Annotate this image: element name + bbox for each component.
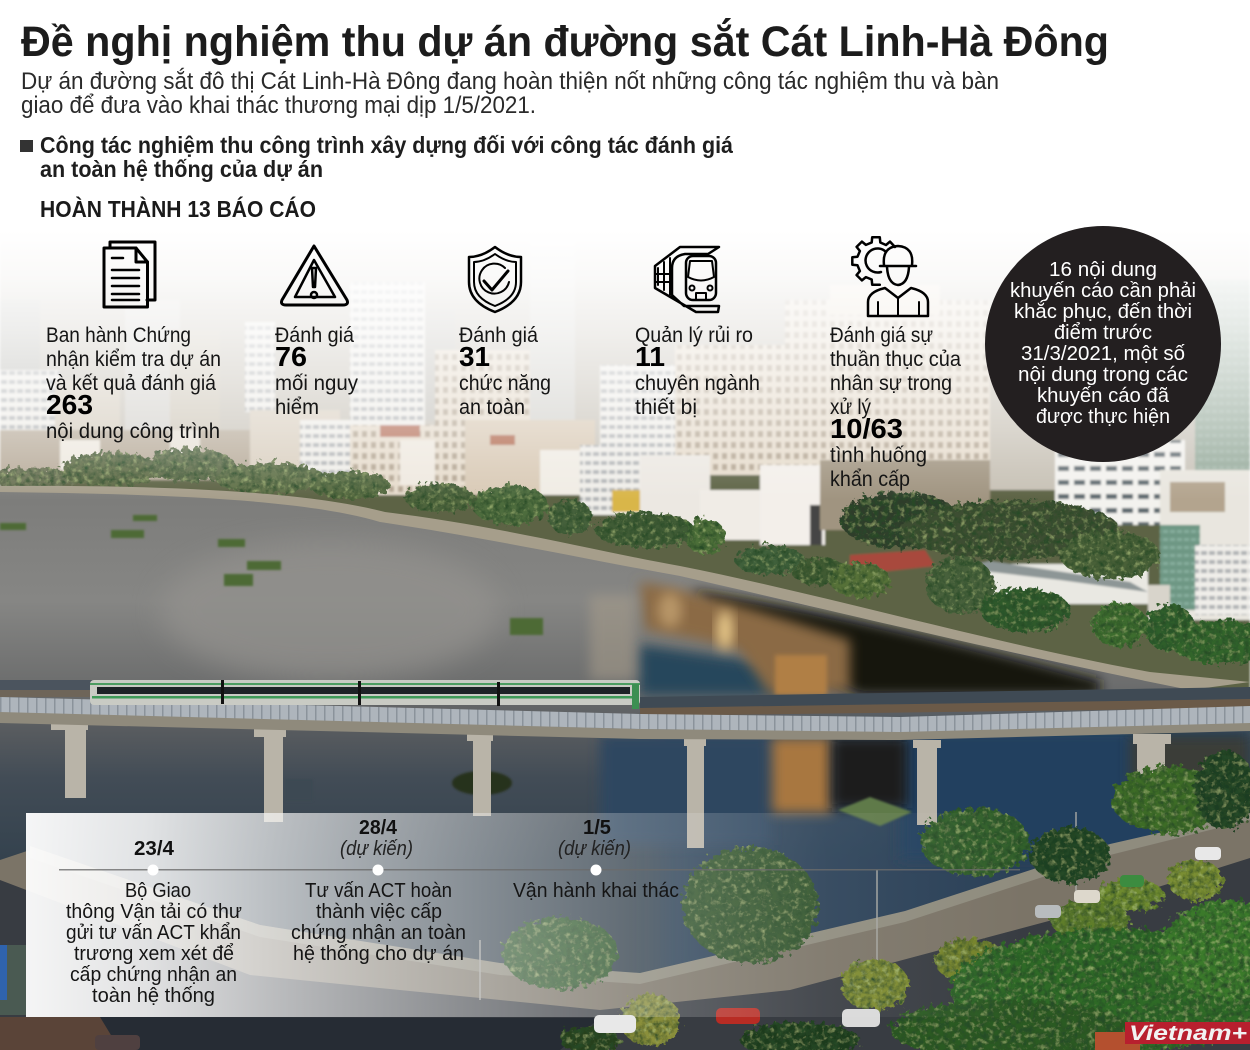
text: certificate: nhận kiểm tra dự án	[46, 348, 221, 371]
logo: Vietnam+: Vietnam+	[1129, 1022, 1247, 1045]
tree line along shore	[0, 448, 1250, 664]
far bottom road and park	[0, 766, 1250, 1050]
milestone 28/4: thành việc cấp	[316, 901, 442, 923]
sub heading: HOÀN THÀNH 13 BÁO CÁO	[40, 195, 316, 222]
item: risk management	[635, 247, 760, 419]
milestone 23/4	[66, 838, 242, 1007]
text: staff proficiency: tình huống	[830, 444, 927, 467]
callout: recommendations circle: điểm trước	[1054, 322, 1152, 344]
text: hazards: Đánh giá	[275, 324, 354, 347]
text: certificate	[46, 324, 221, 443]
pillars	[51, 722, 1171, 848]
milestone 23/4: gửi tư vấn ACT khẩn	[66, 922, 241, 944]
text: risk management	[635, 324, 760, 419]
milestone 1/5: 1/5	[583, 817, 611, 839]
text: staff proficiency: nhân sự trong	[830, 372, 952, 395]
elevated railway	[0, 680, 1250, 848]
icon: metro train	[655, 247, 719, 312]
milestone 1/5	[513, 817, 679, 902]
text: hazards	[275, 324, 358, 419]
text: safety functions: an toàn	[459, 396, 525, 419]
text: staff proficiency	[830, 324, 961, 491]
section heading: an toàn hệ thống của dự án	[40, 156, 323, 182]
text: risk management: Quản lý rủi ro	[635, 324, 753, 347]
milestone 28/4: 28/4	[359, 817, 398, 839]
milestone 28/4: chứng nhận an toàn	[291, 922, 466, 944]
callout: recommendations circle: 31/3/2021, một số	[1021, 343, 1185, 365]
item: hazards	[275, 246, 358, 419]
cars	[95, 847, 1221, 1050]
text: risk management: chuyên ngành	[635, 372, 760, 395]
icon: documents	[104, 242, 155, 307]
text: hazards: mối nguy	[275, 372, 358, 395]
intro text	[21, 68, 999, 119]
text: hazards: hiểm	[275, 396, 319, 419]
item: certificate report	[46, 242, 221, 443]
milestone 23/4: cấp chứng nhận an	[70, 964, 237, 986]
text: certificate: Ban hành Chứng	[46, 324, 191, 347]
milestone 28/4	[291, 817, 466, 965]
callout: recommendations circle: khuyến cáo cần phải	[1010, 280, 1196, 302]
foreground trees	[502, 750, 1250, 1050]
text: staff proficiency: khẩn cấp	[830, 468, 910, 491]
milestone 23/4: thông Vận tải có thư	[66, 901, 242, 923]
item: staff proficiency	[830, 237, 961, 491]
text: risk management: thiết bị	[635, 396, 697, 419]
title: Đề nghị nghiệm thu dự án đường sắt Cát Linh-Hà Đông	[21, 17, 1109, 66]
embankment	[0, 486, 1250, 690]
callout: recommendations circle: nội dung trong các	[1018, 364, 1188, 386]
text: safety functions: Đánh giá	[459, 324, 538, 347]
milestone 1/5: Vận hành khai thác	[513, 880, 679, 902]
milestone 23/4: 23/4	[134, 838, 175, 860]
text: staff proficiency: Đánh giá sự	[830, 324, 933, 347]
item: safety functions	[459, 247, 551, 419]
lake reflections	[590, 582, 1250, 860]
milestone 23/4: toàn hệ thống	[92, 985, 215, 1007]
floating green islands	[0, 515, 912, 826]
text: safety functions: chức năng	[459, 372, 551, 395]
section heading	[40, 132, 733, 182]
callout: recommendations circle: 16 nội dung	[1049, 259, 1157, 281]
section bullet	[20, 140, 33, 152]
milestone 23/4: trương xem xét để	[74, 943, 234, 965]
text: safety functions	[459, 324, 551, 419]
icon: shield with check	[469, 247, 521, 312]
milestone 28/4: hệ thống cho dự án	[293, 943, 464, 965]
text: hazards: 76	[275, 341, 307, 372]
intro text: giao để đưa vào khai thác thương mại dịp 1/5/2021.	[21, 92, 536, 119]
text: risk management: 11	[635, 341, 665, 372]
text: safety functions: 31	[459, 341, 490, 372]
icon: engineer with gear	[852, 237, 928, 316]
text: staff proficiency: 10/63	[830, 413, 903, 444]
text: staff proficiency: xử lý	[830, 396, 871, 419]
text: certificate: nội dung công trình	[46, 420, 220, 443]
milestone 23/4: Bộ Giao	[125, 880, 191, 902]
text: certificate: 263	[46, 389, 93, 420]
callout: recommendations circle	[985, 226, 1221, 462]
train	[90, 680, 640, 709]
milestone 28/4: (dự kiến)	[340, 838, 413, 860]
text: staff proficiency: thuần thục của	[830, 348, 961, 371]
milestone 1/5: (dự kiến)	[558, 838, 631, 860]
city skyline	[0, 225, 1250, 710]
milestone 28/4: Tư vấn ACT hoàn	[305, 880, 452, 902]
timeline axis	[59, 864, 1020, 876]
water	[0, 490, 1250, 1010]
panel: timeline	[26, 813, 1026, 1017]
callout: recommendations circle: được thực hiện	[1036, 406, 1170, 428]
text: certificate: và kết quả đánh giá	[46, 372, 216, 395]
icon: warning triangle	[282, 246, 348, 305]
section heading: Công tác nghiệm thu công trình xây dựng đối với công tác đánh giá	[40, 132, 733, 158]
callout: recommendations circle: khắc phục, đến thời	[1014, 300, 1192, 323]
callout: recommendations circle: khuyến cáo đã	[1037, 385, 1170, 407]
intro text: Dự án đường sắt đô thị Cát Linh-Hà Đông đang hoàn thiện nốt những công tác nghiệm thu và bàn	[21, 68, 999, 95]
